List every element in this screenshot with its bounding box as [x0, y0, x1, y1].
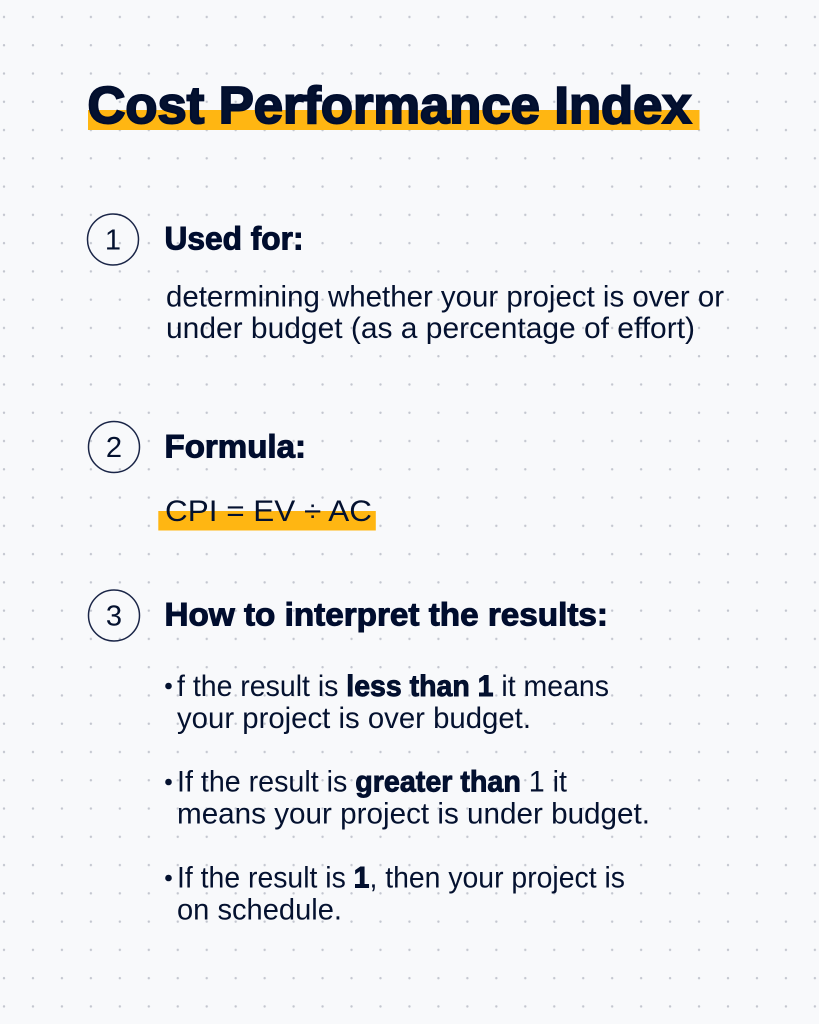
section 3: interpretation — [88, 590, 650, 926]
icon: number 1 — [88, 214, 138, 265]
text: used for description: determining whether your project is over or — [166, 280, 724, 314]
bullet: less than 1 — [165, 670, 609, 735]
icon: number 3 — [88, 590, 140, 641]
icon: number 2 — [88, 422, 140, 472]
icon: number 2: 2 — [106, 432, 122, 464]
bullet: equal to 1: on schedule. — [177, 894, 342, 926]
icon: number 3: 3 — [106, 600, 122, 632]
bullet: less than 1: f the result is less than 1 it means — [177, 670, 609, 703]
bullet: greater than 1: If the result is greater than 1 it — [177, 766, 568, 798]
bullet: less than 1: your project is over budget. — [177, 702, 531, 735]
section 2: formula — [88, 422, 376, 530]
bullet: equal to 1 — [165, 862, 625, 926]
section 1: used for — [88, 214, 732, 345]
heading: used for: Used for: — [164, 220, 304, 256]
text: used for description: under budget (as a percentage of effort) — [166, 312, 695, 345]
icon: number 1: 1 — [105, 224, 121, 256]
bullet: greater than 1: means your project is under budget. — [177, 798, 650, 830]
formula with highlight: CPI = EV ÷ AC — [165, 495, 372, 528]
heading: formula: Formula: — [164, 428, 306, 464]
bullet: greater than 1 — [165, 766, 650, 830]
heading: how to interpret: How to interpret the results: — [164, 596, 608, 632]
bullet: equal to 1: If the result is 1, then your project is — [177, 862, 625, 894]
title: Cost Performance Index — [88, 77, 692, 135]
